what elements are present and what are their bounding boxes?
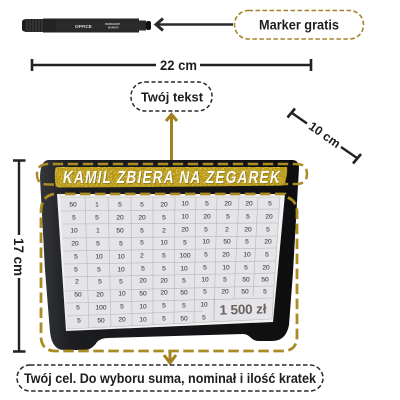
number grid: 5 [268, 200, 272, 208]
number grid: 20 [160, 290, 168, 296]
number grid: 20 [96, 292, 104, 298]
number grid: 5 [98, 278, 102, 286]
number grid: 5 [246, 214, 250, 220]
number grid: 5 [162, 266, 166, 272]
number grid: 5 [119, 278, 123, 286]
number grid: 5 [141, 266, 145, 272]
number grid: 20 [181, 226, 189, 234]
number grid: 10 [181, 214, 189, 220]
number grid: 10 [70, 228, 78, 234]
number grid: 10 [222, 264, 230, 272]
number grid: 50 [241, 288, 249, 296]
number grid: 20 [118, 316, 126, 324]
number grid: 5 [205, 200, 209, 208]
gold dashed outline: grid goal [41, 194, 297, 351]
number grid: 10 [139, 304, 147, 310]
number grid: 5 [203, 264, 207, 272]
number grid: 10 [95, 254, 103, 260]
number grid: 5 [162, 214, 166, 222]
dimension: 22 cm width [32, 57, 311, 73]
dimension: 10 cm depth: 10 cm [306, 119, 343, 151]
dimension: 17 cm height: 17 cm [11, 238, 27, 276]
number grid: 5 [265, 252, 269, 258]
callout: your text [131, 82, 212, 111]
number grid: 5 [76, 304, 80, 312]
number grid: 20 [138, 214, 146, 222]
number grid: 5 [118, 202, 122, 208]
number grid: 5 [95, 214, 99, 222]
number grid: 5 [72, 214, 76, 222]
number grid: 1 [95, 202, 99, 208]
number grid [69, 200, 273, 324]
marker pen: OFFICE [75, 24, 92, 29]
number grid: 50 [69, 202, 77, 208]
number grid: 5 [203, 288, 207, 296]
callout: marker gratis [234, 10, 364, 39]
number grid: 5 [183, 240, 187, 246]
number grid: 5 [182, 278, 186, 284]
number grid: 10 [180, 266, 188, 272]
number grid: 20 [139, 278, 147, 284]
number grid: 5 [245, 238, 249, 246]
number grid: 2 [140, 252, 144, 260]
number grid: 10 [201, 276, 209, 284]
gold dashed outline: name strip [37, 164, 307, 184]
number grid: 20 [160, 278, 168, 284]
number grid: 10 [117, 266, 125, 274]
marker pen: MARKER [108, 26, 119, 30]
number grid: 5 [74, 254, 78, 260]
marker pen [22, 18, 151, 32]
number grid: 10 [118, 290, 126, 298]
number grid: 100 [179, 252, 191, 260]
number grid: 50 [223, 238, 231, 246]
number grid: 5 [140, 240, 144, 246]
number grid: 50 [97, 318, 105, 324]
number grid: 20 [244, 226, 252, 234]
number grid: 20 [160, 202, 168, 208]
number grid: 10 [117, 254, 125, 260]
number grid: 50 [180, 290, 188, 296]
number grid: 20 [203, 214, 211, 220]
number grid: 5 [162, 302, 166, 310]
number grid: 5 [244, 264, 248, 272]
number grid: 5 [140, 228, 144, 234]
number grid: 5 [120, 304, 124, 310]
number grid: 2 [162, 228, 166, 234]
callout: marker gratis: Marker gratis [259, 16, 339, 32]
number grid: 5 [96, 240, 100, 248]
callout: your goal: Twój cel. Do wyboru suma, nominał i ilość kratek [24, 370, 316, 386]
number grid: 5 [97, 266, 101, 274]
number grid: 20 [262, 264, 270, 272]
number grid: 5 [266, 226, 270, 234]
number grid: 5 [140, 202, 144, 208]
number grid: 1 [96, 228, 100, 234]
number grid: 10 [160, 240, 168, 246]
marker pen: PERMANENT [105, 23, 121, 26]
number grid: 10 [139, 316, 147, 324]
number grid: 2 [225, 226, 229, 234]
number grid: 5 [162, 316, 166, 322]
number grid: 20 [224, 200, 232, 208]
number grid: 50 [242, 276, 250, 284]
number grid: 50 [180, 316, 188, 322]
number grid: 2 [75, 278, 79, 286]
number grid: 5 [74, 266, 78, 274]
number grid: 50 [139, 290, 147, 298]
number grid: 50 [116, 228, 124, 234]
number grid: 20 [222, 252, 230, 258]
number grid: 5 [223, 276, 227, 284]
number grid: 5 [77, 318, 81, 324]
number grid: 5 [263, 288, 267, 296]
whiteboard frame [40, 160, 299, 350]
number grid: 5 [204, 226, 208, 234]
number grid: 5 [204, 252, 208, 258]
number grid: 10 [200, 302, 208, 308]
number grid: 5 [226, 214, 230, 220]
number grid: 50 [74, 292, 82, 298]
number grid: 10 [202, 238, 210, 246]
number grid: 5 [162, 252, 166, 260]
number grid: 20 [221, 288, 229, 296]
total amount: 1 500 zł [219, 301, 267, 318]
number grid: 5 [119, 240, 123, 248]
dimension: 10 cm depth [288, 108, 361, 164]
number grid: 20 [116, 214, 124, 222]
number grid: 5 [202, 314, 206, 322]
arrow: gold down to goal callout [164, 352, 176, 363]
number grid: 20 [264, 238, 272, 246]
callout: your goal [17, 365, 323, 391]
arrow: gold up to your text [166, 114, 177, 164]
number grid: 10 [243, 252, 251, 258]
number grid: 5 [182, 302, 186, 310]
dimension: 17 cm height [11, 160, 27, 352]
number grid: 20 [265, 214, 273, 220]
arrow: marker gratis to marker [156, 18, 233, 30]
number grid: 10 [181, 200, 189, 208]
gold name strip: KAMIL ZBIERA NA ZEGAREK [64, 168, 282, 188]
number grid: 50 [261, 276, 269, 284]
number grid: 100 [95, 304, 107, 312]
callout: your text: Twój tekst [141, 90, 204, 104]
white grid sheet [57, 194, 285, 331]
number grid: 20 [245, 200, 253, 208]
dimension: 22 cm width: 22 cm [160, 57, 197, 73]
number grid: 20 [71, 240, 79, 248]
gold name strip: KAMIL ZBIERA NA ZEGAREK [63, 167, 281, 187]
